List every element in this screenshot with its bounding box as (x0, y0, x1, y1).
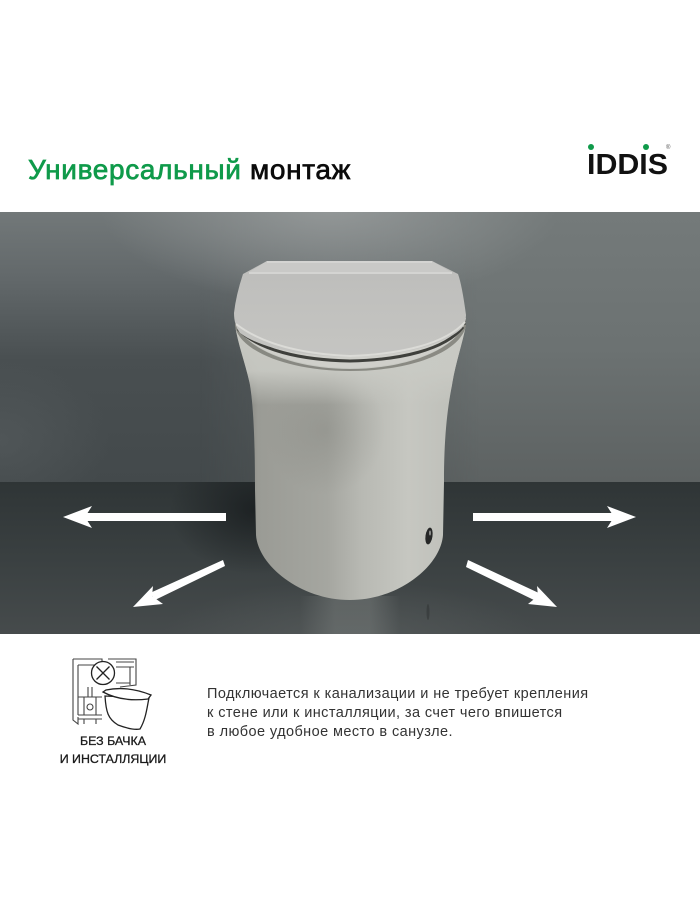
icon: crossed circle (92, 662, 114, 684)
icon: frame (73, 659, 136, 724)
title: Универсальный монтаж (28, 154, 351, 185)
description text: в любое удобное место в санузле. (207, 724, 453, 740)
toilet rim (235, 318, 466, 371)
arrow: right (473, 506, 636, 528)
description text: Подключается к канализации и не требует крепления (207, 686, 588, 702)
product photo panel (0, 212, 700, 634)
description text: к стене или к инсталляции, за счет чего впишется (207, 705, 562, 721)
arrow: down right (466, 560, 557, 607)
icon: no tank or installation (72, 658, 152, 730)
arrow: down left (133, 560, 225, 607)
wall (0, 212, 700, 482)
icon: toilet outline (103, 689, 151, 729)
logo: IDDIS: ® (666, 144, 671, 151)
toilet lid (234, 261, 466, 357)
drain button (425, 528, 433, 544)
description text (207, 686, 588, 740)
icon caption: БЕЗ БАЧКА (80, 734, 146, 748)
icon caption (60, 734, 166, 766)
icon caption: И ИНСТАЛЛЯЦИИ (60, 752, 166, 766)
floor (0, 482, 700, 634)
toilet (230, 261, 470, 600)
toilet body (235, 325, 466, 600)
arrow: left (63, 506, 226, 528)
